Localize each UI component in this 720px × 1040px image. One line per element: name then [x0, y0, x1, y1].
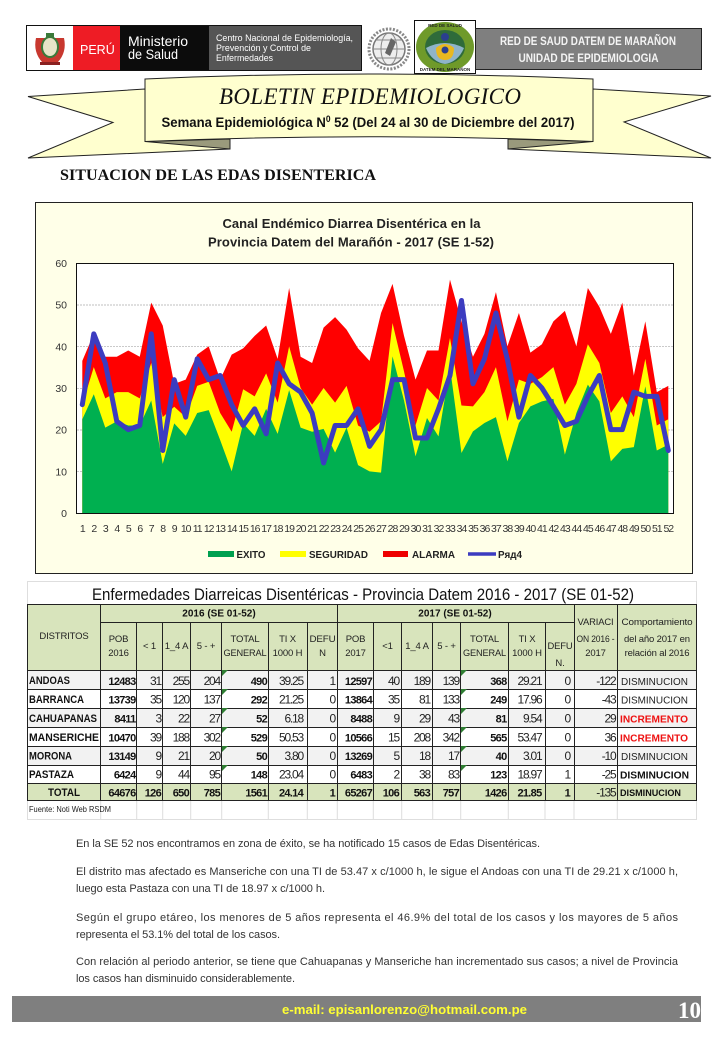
row: Manseriche: 0: [330, 730, 337, 744]
icon: Red de Salud Datem del Marañon logo: RED DE SALUD: [428, 23, 463, 28]
row: Total: 65267: [345, 788, 373, 800]
x axis labels: 47: [606, 523, 617, 535]
header logo bar: Ministerio de Salud: Enfermedades: [216, 53, 273, 63]
x axis labels: 51: [652, 523, 663, 535]
row: Total: 1561: [245, 788, 268, 800]
x axis labels: 12: [204, 523, 215, 535]
chart legend: Ряд4: [498, 549, 522, 561]
row: Total: 126: [145, 788, 162, 800]
table header labels: DEFU: [548, 641, 573, 652]
row: Manseriche: 0: [565, 730, 572, 744]
row: Total: 21.85: [517, 788, 542, 800]
x axis labels: 30: [411, 523, 421, 535]
x axis labels: 28: [388, 523, 398, 535]
header logo bar: Ministerio de Salud: Prevención y Control de: [216, 43, 311, 53]
x axis labels: 16: [250, 523, 261, 535]
row: Barranca: 81: [419, 692, 432, 706]
x axis labels: 13: [215, 523, 226, 535]
area and line series: [82, 280, 668, 513]
table grid lines: [27, 604, 697, 801]
table header labels: 2016 (SE 01-52): [182, 608, 256, 620]
x axis labels: [80, 523, 674, 535]
row: Andoas: 255: [173, 674, 191, 688]
row: Total: 1426: [485, 788, 507, 800]
chart title: Canal Endémico Diarrea Disentérica en la: [222, 216, 481, 231]
x axis labels: 49: [629, 523, 640, 535]
row: Cahuapanas: 9: [394, 712, 401, 726]
row: Pastaza: 9: [156, 768, 163, 782]
header box: network and unit: [476, 28, 702, 70]
x axis labels: 14: [227, 523, 238, 535]
x axis labels: 18: [273, 523, 284, 535]
row: Cahuapanas: 29: [605, 712, 617, 726]
row: Pastaza: 148: [251, 770, 268, 782]
row: Manseriche: 302: [204, 730, 222, 744]
row: Pastaza: PASTAZA: [29, 769, 74, 781]
plot area: [76, 264, 674, 514]
text block: analysis: luego esta Pastaza con una TI de 18.97 x c/1000 h.: [76, 883, 325, 895]
row: Cahuapanas: 3: [156, 712, 163, 726]
row: Andoas: 139: [443, 674, 461, 688]
row: Barranca: 21.25: [279, 692, 305, 706]
icon: globe logo: [369, 29, 409, 69]
table header labels: 1000 H: [273, 648, 303, 659]
row: Cahuapanas: 81: [496, 714, 507, 726]
x axis labels: 20: [296, 523, 307, 535]
table header labels: 2017: [585, 648, 606, 659]
x axis labels: 8: [160, 523, 166, 535]
row: Barranca: 17.96: [517, 692, 543, 706]
row: Manseriche: 188: [173, 730, 191, 744]
row: Morona: 18: [419, 749, 432, 763]
row: Manseriche: 342: [443, 730, 461, 744]
row: Pastaza: 38: [419, 768, 432, 782]
row: Andoas: 1: [330, 674, 337, 688]
row: Morona: 21: [178, 749, 191, 763]
row: Pastaza: [29, 768, 689, 782]
y axis labels: 0: [61, 508, 67, 520]
row: Barranca: 0: [330, 692, 337, 706]
x axis labels: 10: [181, 523, 192, 535]
x axis labels: 36: [480, 523, 490, 535]
row: Barranca: 137: [204, 692, 222, 706]
row: Cahuapanas: INCREMENTO: [620, 714, 688, 726]
row: Pastaza: 1: [565, 768, 572, 782]
section heading: SITUACION DE LAS EDAS DISENTERICA: [60, 167, 377, 184]
table header labels: Comportamiento: [622, 617, 692, 628]
x axis labels: 29: [399, 523, 410, 535]
table header labels: del año 2017 en: [624, 634, 690, 645]
row: Cahuapanas: 29: [419, 712, 432, 726]
x axis labels: 24: [342, 523, 353, 535]
row: Andoas: 40: [388, 674, 401, 688]
text block: analysis: representa el 53.1% del total de los casos.: [76, 929, 280, 941]
footer bar: [12, 996, 701, 1023]
table header labels: 5 - +: [437, 641, 456, 652]
x axis labels: 4: [114, 523, 120, 535]
banner subtitle: 0: [326, 114, 331, 124]
row: Total: TOTAL: [48, 787, 80, 799]
row: Pastaza: 18.97: [517, 768, 543, 782]
row: Cahuapanas: 8411: [114, 714, 136, 726]
row: Pastaza: 6483: [350, 770, 373, 782]
row: Pastaza: 6424: [114, 770, 137, 782]
row: Morona: [29, 749, 688, 763]
row: Pastaza: 2: [394, 768, 401, 782]
text block: analysis: Con relación al periodo anterior, se tiene que Cahuapanas y Manseriche han incrementado sus casos; a nivel de Provincia: [76, 956, 679, 968]
header box: network and unit: RED DE SAUD DATEM DE MARAÑON: [500, 35, 676, 48]
table source note: Fuente: Noti Web RSDM: [29, 804, 111, 814]
table header labels: 2017: [345, 648, 366, 659]
cell comment markers: [222, 670, 467, 771]
table header labels: <1: [382, 641, 393, 652]
table header labels: TI X: [519, 634, 536, 645]
row: Cahuapanas: 27: [209, 712, 222, 726]
y axis labels: [55, 258, 67, 520]
table header labels: POB: [109, 634, 128, 645]
x axis labels: 25: [353, 523, 364, 535]
x axis labels: 3: [103, 523, 109, 535]
x axis labels: 22: [319, 523, 330, 535]
table header labels: ON 2016 -: [576, 634, 614, 645]
row: Barranca: 13864: [345, 694, 374, 706]
table title: Enfermedades Diarreicas Disentéricas - Provincia Datem 2016 - 2017 (SE 01-52): [92, 585, 634, 604]
row: Morona: 13269: [345, 751, 373, 763]
table header labels: DISTRITOS: [39, 631, 89, 642]
icon: Red de Salud Datem del Marañon logo: [414, 20, 476, 74]
banner subtitle: 52 (Del 24 al 30 de Diciembre del 2017): [331, 114, 574, 130]
row: Manseriche: MANSERICHE: [29, 732, 99, 744]
row: Cahuapanas: 0: [330, 712, 337, 726]
table header labels: GENERAL: [224, 648, 266, 659]
x axis labels: 33: [445, 523, 456, 535]
row: Barranca: 0: [565, 692, 572, 706]
row: Morona: 0: [565, 749, 572, 763]
header and row fills: [27, 604, 697, 670]
row: Total: 24.14: [279, 788, 305, 800]
y axis labels: 40: [55, 341, 67, 353]
banner subtitle: Semana Epidemiológica N: [162, 114, 337, 130]
row: Barranca: DISMINUCION: [621, 696, 688, 706]
row: Total: 106: [383, 788, 400, 800]
icon: Red de Salud Datem del Marañon logo: DATEM DEL MARAÑON: [420, 66, 470, 72]
row: Manseriche: 10470: [108, 732, 136, 744]
row: Barranca: 120: [173, 692, 191, 706]
row: Andoas: 29.21: [517, 674, 543, 688]
header logo bar: Ministerio de Salud: de Salud: [128, 46, 178, 62]
row: Barranca: 133: [443, 692, 461, 706]
row: Manseriche: 15: [388, 730, 401, 744]
x axis labels: 17: [261, 523, 272, 535]
x axis labels: 19: [284, 523, 295, 535]
row: Manseriche: 36: [605, 730, 617, 744]
row: Pastaza: 83: [448, 768, 461, 782]
x axis labels: 48: [617, 523, 628, 535]
icon: Peru coat of arms: [35, 33, 65, 65]
row: Cahuapanas: 52: [256, 714, 268, 726]
table header labels: TOTAL: [470, 634, 499, 645]
x axis labels: 32: [434, 523, 444, 535]
table header labels: 1_4 A: [165, 641, 189, 652]
row: Manseriche: 565: [490, 732, 507, 744]
table header labels: 2016: [108, 648, 129, 659]
table header labels: < 1: [143, 641, 156, 652]
header logo bar: Ministerio de Salud: Centro Nacional de Epidemiología,: [216, 33, 353, 43]
row: Barranca: 249: [490, 694, 507, 706]
row: Total: 785: [204, 788, 221, 800]
table header labels: TI X: [279, 634, 297, 645]
table header labels: [39, 608, 692, 669]
row: Andoas: 39.25: [279, 674, 305, 688]
table header labels: GENERAL: [463, 648, 506, 659]
x axis labels: 23: [330, 523, 341, 535]
row: Cahuapanas: CAHUAPANAS: [29, 713, 97, 725]
row: Total: 757: [443, 788, 460, 800]
row: Cahuapanas: [29, 712, 688, 726]
row: Pastaza: 95: [209, 768, 222, 782]
row: Manseriche: [29, 730, 688, 744]
x axis labels: 52: [663, 523, 674, 535]
row: Pastaza: 44: [178, 768, 191, 782]
row: Cahuapanas: 43: [448, 712, 461, 726]
table header labels: POB: [346, 634, 365, 645]
chart legend: EXITO: [236, 549, 266, 561]
table header labels: 5 - +: [197, 641, 216, 652]
row: Andoas: DISMINUCION: [621, 677, 688, 688]
table header labels: VARIACI: [578, 617, 614, 628]
row: Morona: 9: [156, 749, 163, 763]
row: Andoas: 0: [565, 674, 572, 688]
row: Total: DISMINUCION: [620, 788, 681, 799]
footer email: e-mail: episanlorenzo@hotmail.com.pe: [282, 1002, 527, 1017]
y axis labels: 60: [55, 258, 67, 270]
row: Barranca: BARRANCA: [29, 694, 84, 706]
chart legend: [208, 549, 522, 561]
x axis labels: 39: [514, 523, 525, 535]
x axis labels: 50: [640, 523, 651, 535]
row: Manseriche: 53.47: [517, 730, 543, 744]
row: Morona: 13149: [108, 751, 136, 763]
x axis labels: 6: [137, 523, 143, 535]
x axis labels: 35: [468, 523, 479, 535]
text block: analysis: los casos han disminuido considerablemente.: [76, 973, 295, 985]
row: Cahuapanas: 9.54: [523, 712, 543, 726]
row: Manseriche: INCREMENTO: [620, 732, 688, 744]
row: Morona: -10: [602, 749, 617, 763]
text block: analysis: Según el grupo etáreo, los menores de 5 años representa el 46.9% del total de los casos y los mayores de 5 años: [76, 912, 679, 924]
row: Pastaza: -25: [602, 768, 617, 782]
row: Andoas: 490: [251, 676, 268, 688]
row: Total: [48, 786, 681, 800]
row: Total: 1: [565, 788, 571, 800]
table header labels: TOTAL: [230, 634, 260, 645]
banner title: BOLETIN EPIDEMIOLOGICO: [219, 84, 521, 109]
x axis labels: 9: [172, 523, 178, 535]
row: Barranca: 35: [150, 692, 163, 706]
text block: analysis: [76, 838, 679, 985]
row: Pastaza: 0: [330, 768, 337, 782]
x axis labels: 26: [365, 523, 376, 535]
row: Morona: 20: [209, 749, 222, 763]
row: Andoas: [29, 674, 688, 688]
chart legend: ALARMA: [412, 549, 455, 561]
x axis labels: 15: [238, 523, 249, 535]
row: Andoas: 12483: [108, 676, 136, 688]
row: Cahuapanas: 6.18: [284, 712, 305, 726]
row: Manseriche: 50.53: [279, 730, 305, 744]
row: Pastaza: 23.04: [279, 768, 305, 782]
row: Andoas: 12597: [345, 676, 373, 688]
row: Morona: MORONA: [29, 750, 72, 762]
x axis labels: 42: [549, 523, 559, 535]
row: Pastaza: DISMINUCION: [620, 770, 689, 782]
x axis labels: 2: [91, 523, 97, 535]
row: Morona: 50: [256, 751, 268, 763]
x axis labels: 44: [572, 523, 582, 535]
row: Manseriche: 39: [150, 730, 163, 744]
x axis labels: 45: [583, 523, 594, 535]
row: Morona: 3.01: [523, 749, 543, 763]
row: Pastaza: 123: [490, 770, 507, 782]
header logo bar: Ministerio de Salud: Ministerio: [128, 33, 188, 49]
row: Total: 650: [173, 788, 190, 800]
row: Morona: 5: [394, 749, 401, 763]
row: Manseriche: 10566: [345, 732, 373, 744]
table header labels: 1_4 A: [405, 641, 430, 652]
x axis labels: 37: [491, 523, 502, 535]
table header labels: N.: [555, 658, 565, 669]
row: Total: -135: [596, 786, 617, 800]
row: Andoas: 31: [150, 674, 163, 688]
y axis labels: 50: [55, 300, 67, 312]
header box: network and unit: UNIDAD DE EPIDEMIOLOGIA: [518, 53, 658, 65]
row: Andoas: 368: [490, 676, 507, 688]
y axis labels: 30: [55, 383, 67, 395]
row: Barranca: [29, 692, 688, 706]
title ribbon banner: [28, 74, 711, 158]
page number: 10: [678, 998, 701, 1023]
table header labels: 1000 H: [512, 648, 542, 659]
row: Cahuapanas: 22: [178, 712, 191, 726]
x axis labels: 40: [526, 523, 536, 535]
panel: district data table: [27, 582, 697, 820]
x axis labels: 41: [537, 523, 548, 535]
row: Barranca: -43: [602, 692, 617, 706]
table header labels: relación al 2016: [625, 648, 689, 659]
x axis labels: 31: [422, 523, 433, 535]
row: Morona: 40: [496, 751, 507, 763]
x axis labels: 38: [503, 523, 513, 535]
chart title: [208, 216, 494, 250]
x axis labels: 34: [457, 523, 467, 535]
x axis labels: 43: [560, 523, 571, 535]
x axis labels: 7: [149, 523, 155, 535]
chart title: Provincia Datem del Marañón - 2017 (SE 1-52): [208, 234, 494, 250]
x axis labels: 11: [193, 523, 203, 535]
y axis labels: 10: [55, 466, 67, 478]
y axis labels: 20: [55, 425, 67, 437]
text block: analysis: En la SE 52 nos encontramos en zona de éxito, se ha notificado 15 casos de Edas Disentéricas.: [76, 838, 540, 850]
text block: analysis: El distrito mas afectado es Manseriche con una TI de 53.47 x c/1000 h, le sigue el Andoas con una TI de 29.21 x c/1000 h,: [76, 866, 678, 878]
header logo bar: Ministerio de Salud: PERÚ: [80, 42, 115, 57]
table header labels: 2017 (SE 01-52): [418, 608, 492, 620]
row: Morona: 0: [330, 749, 337, 763]
x axis labels: 27: [376, 523, 387, 535]
row: Barranca: 13739: [108, 694, 136, 706]
panel: endemic channel chart: [36, 202, 692, 574]
x axis labels: 21: [307, 523, 318, 535]
row: Andoas: 189: [414, 674, 432, 688]
row: Manseriche: 529: [251, 732, 268, 744]
row: Morona: DISMINUCION: [621, 752, 688, 763]
table header labels: DEFU: [310, 634, 336, 645]
row: Total: 64676: [108, 788, 136, 800]
x axis labels: 5: [126, 523, 132, 535]
row: Morona: 17: [448, 749, 461, 763]
row: Cahuapanas: 0: [565, 712, 572, 726]
row: Andoas: ANDOAS: [29, 675, 70, 687]
header logo bar: Ministerio de Salud: [26, 26, 362, 70]
row: Morona: 3.80: [284, 749, 305, 763]
row: Cahuapanas: 8488: [350, 714, 373, 726]
row: Total: 1: [330, 788, 336, 800]
x axis labels: 46: [595, 523, 605, 535]
row: Barranca: 292: [251, 694, 268, 706]
spreadsheet faint grid: [28, 582, 696, 820]
row: Andoas: 204: [204, 674, 222, 688]
row: Manseriche: 208: [414, 730, 432, 744]
chart legend: SEGURIDAD: [309, 549, 368, 561]
row: Andoas: -122: [596, 674, 617, 688]
x axis labels: 1: [80, 523, 86, 535]
row: Total: 563: [414, 788, 431, 800]
row: Barranca: 35: [388, 692, 401, 706]
table header labels: N: [319, 648, 326, 659]
